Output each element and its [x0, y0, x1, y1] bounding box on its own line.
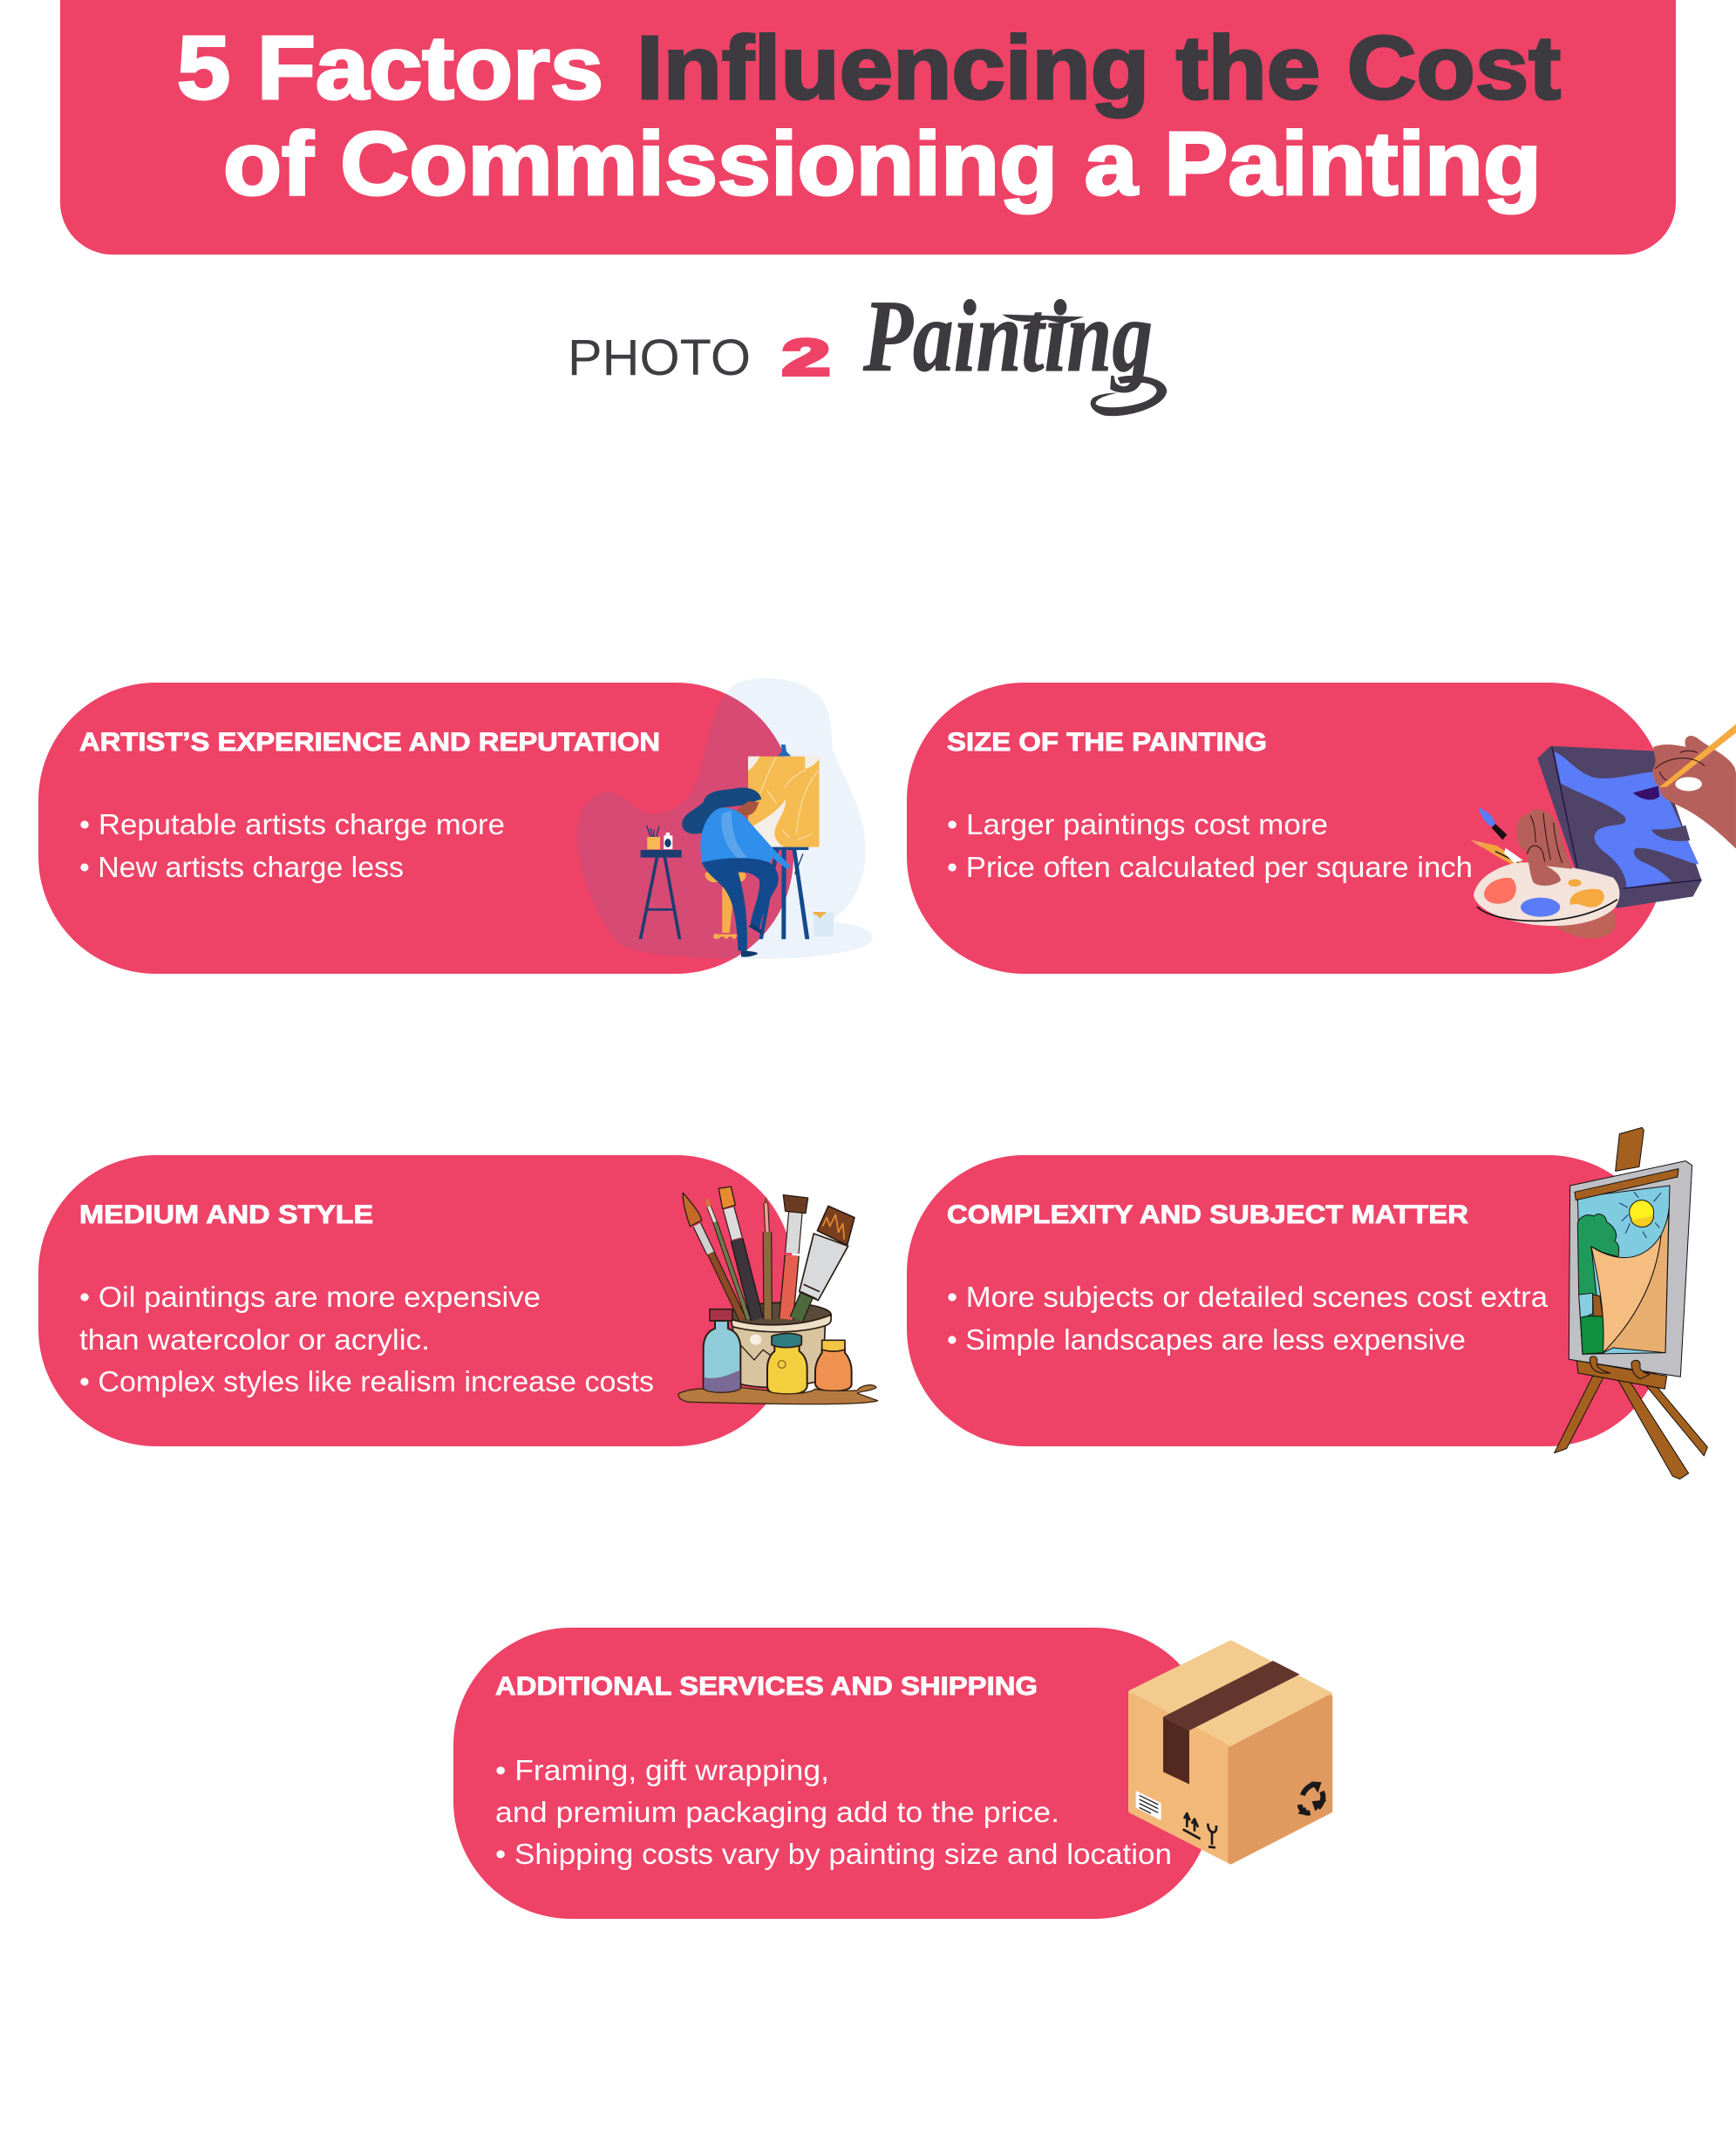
icon: brushes in pot with paint bottles — [678, 1187, 878, 1404]
logo: Photo 2 Painting: PHOTO — [568, 330, 751, 386]
bullet list: • Reputable artists charge more — [79, 808, 505, 840]
sun — [1630, 1200, 1654, 1225]
bullet list: • Oil paintings are more expensive — [79, 1281, 541, 1313]
bullet list: than watercolor or acrylic. — [79, 1323, 430, 1356]
peeled paper — [1603, 1209, 1669, 1353]
frame — [1569, 1161, 1692, 1377]
handling marks — [1183, 1813, 1216, 1847]
logo: Photo 2 Painting: Painting — [862, 279, 1153, 393]
card shape — [38, 683, 793, 974]
bullet list — [79, 1281, 654, 1397]
heading: SIZE OF THE PAINTING — [947, 728, 1267, 757]
logo: Photo 2 Painting — [568, 279, 1167, 416]
bullet list — [947, 808, 1473, 883]
heading: ARTIST’S EXPERIENCE AND REPUTATION — [79, 728, 660, 757]
card shape — [453, 1628, 1212, 1919]
right hand — [1652, 736, 1736, 848]
title: of Commissioning a Painting — [223, 113, 1542, 214]
left hand — [1517, 809, 1572, 886]
shipping label — [1136, 1791, 1161, 1820]
panel: artist's experience and reputation — [38, 678, 873, 974]
back and front legs — [1646, 1384, 1707, 1456]
icon: cardboard box — [1131, 1643, 1330, 1861]
stool — [705, 872, 746, 882]
bullet list: • Shipping costs vary by painting size and location — [495, 1838, 1172, 1870]
pot — [732, 1321, 826, 1387]
brush D — [753, 1232, 782, 1319]
bullet list: • Complex styles like realism increase costs — [79, 1365, 654, 1397]
bottle: orange — [815, 1349, 852, 1391]
bullet list: • Price often calculated per square inch — [947, 851, 1473, 883]
card shape — [907, 1155, 1665, 1446]
blob overlapping card — [577, 694, 793, 959]
lower hand — [1555, 909, 1616, 938]
shelf — [678, 1385, 878, 1404]
packing tape — [1163, 1661, 1300, 1731]
card shape — [38, 1155, 793, 1446]
tree — [1577, 1214, 1619, 1354]
heading: COMPLEXITY AND SUBJECT MATTER — [947, 1200, 1468, 1229]
bullet list: • New artists charge less — [79, 851, 404, 883]
title — [177, 17, 1561, 214]
bullet list — [495, 1754, 1172, 1870]
icon: easel with landscape canvas — [1555, 1127, 1707, 1479]
bottle: yellow — [767, 1344, 807, 1395]
bullet list: • More subjects or detailed scenes cost extra — [947, 1281, 1549, 1313]
paint bucket — [814, 913, 834, 936]
light blob behind card — [577, 678, 873, 959]
bullet list — [79, 808, 505, 883]
brush C — [737, 1240, 757, 1319]
side table — [641, 850, 682, 858]
panel: complexity and subject matter — [907, 1127, 1707, 1479]
bottle: blue — [704, 1321, 740, 1393]
panel: medium and style — [38, 1155, 878, 1446]
icon: hands painting a canvas with palette — [1471, 724, 1736, 938]
bullet list — [947, 1281, 1549, 1356]
title: Influencing the Cost — [637, 17, 1561, 118]
panel: size of the painting — [907, 683, 1736, 974]
logo: Photo 2 Painting: 2 — [782, 330, 830, 386]
card shape — [907, 683, 1665, 974]
pencil and small brush — [1471, 840, 1532, 874]
panel: additional services and shipping — [453, 1628, 1330, 1919]
brush B — [715, 1222, 748, 1319]
bullet list: • Simple landscapes are less expensive — [947, 1323, 1466, 1356]
bullet list: and premium packaging add to the price. — [495, 1796, 1059, 1828]
brush F — [796, 1289, 809, 1319]
brush E — [786, 1255, 792, 1319]
bullet list: • Framing, gift wrapping, — [495, 1754, 829, 1786]
pegs — [1590, 1357, 1650, 1379]
bullet list: • Larger paintings cost more — [947, 808, 1328, 840]
title: 5 Factors — [177, 17, 603, 118]
header banner — [60, 0, 1676, 255]
person — [682, 788, 761, 834]
recycle symbol — [1298, 1782, 1326, 1815]
heading: MEDIUM AND STYLE — [79, 1200, 373, 1229]
brush A — [711, 1253, 743, 1319]
heading: ADDITIONAL SERVICES AND SHIPPING — [495, 1672, 1038, 1701]
icon: painter at easel — [639, 745, 834, 957]
palette — [1474, 862, 1619, 926]
